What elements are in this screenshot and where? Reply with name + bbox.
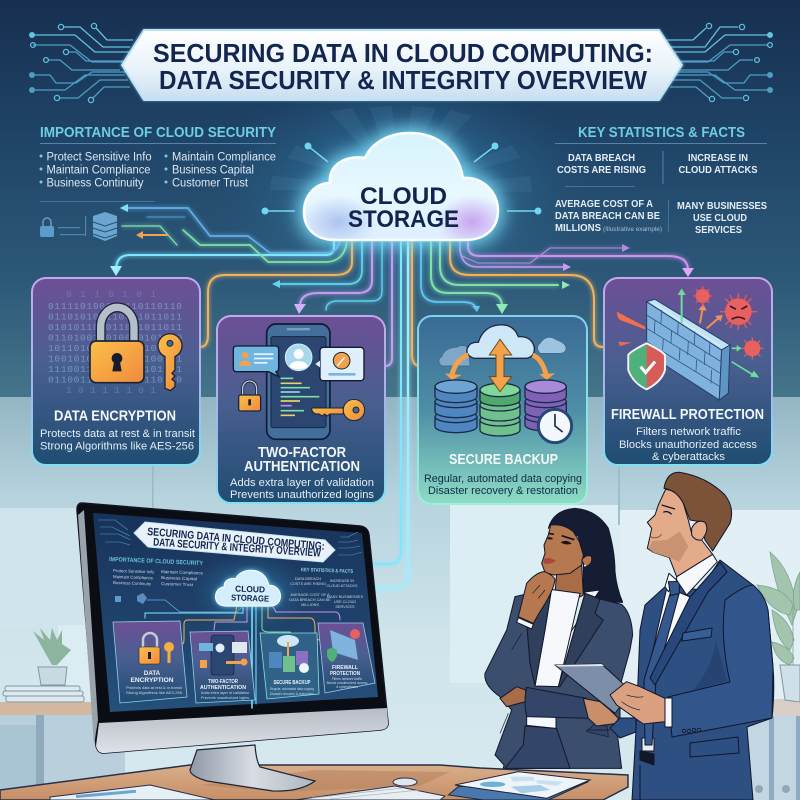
mini right section: CLOUD ATTACKS — [326, 584, 358, 588]
man collar — [647, 472, 732, 596]
panel: importance of cloud security — [40, 124, 276, 241]
mini card: firewall — [318, 623, 375, 693]
mini banner — [134, 522, 335, 562]
woman head and hair — [542, 508, 623, 607]
card description — [40, 428, 195, 452]
mini title: SECURING DATA IN CLOUD COMPUTING: — [147, 526, 325, 553]
right cabinet and plant — [746, 552, 800, 800]
man hip pocket — [690, 737, 739, 757]
mini card: encryption: Protects data at rest & in transit — [126, 686, 183, 690]
mini right section: COSTS ARE RISING — [290, 582, 326, 586]
man lapel — [650, 562, 727, 685]
man waist and belt — [640, 738, 654, 800]
icon: phone with verification — [233, 324, 365, 439]
mini left section: Maintain Compliance — [113, 574, 154, 580]
card description — [230, 477, 374, 501]
man shadow fold — [693, 640, 727, 690]
card description — [619, 426, 757, 463]
cloud label: STORAGE — [348, 206, 459, 233]
stat: breach costs — [557, 152, 646, 176]
cloud storage hub — [300, 133, 508, 248]
icon: right plant — [757, 552, 800, 665]
stat: cloud attacks — [678, 152, 758, 176]
mini left section: Business Continuity — [113, 580, 152, 586]
card heading: AUTHENTICATION — [244, 458, 360, 475]
mini card: encryption: ENCRYPTION — [130, 677, 174, 684]
desk — [0, 765, 628, 800]
mini card: authentication: Prevents unauthorized logins — [201, 696, 249, 700]
card description: Adds extra layer of validation — [230, 477, 374, 489]
circuit traces: right — [667, 23, 773, 102]
mini left section: Protect Sensitive Info — [113, 568, 155, 574]
mini card: backup: Disaster recovery & restoration — [270, 692, 314, 696]
binary pattern: 1 0 1 1 1 1 0 1 — [66, 385, 156, 396]
man jacket — [632, 560, 774, 800]
card description: Disaster recovery & restoration — [428, 485, 578, 497]
man far sleeve — [610, 718, 636, 738]
binary pattern: 100101011010010100101 — [48, 354, 182, 364]
stat: average cost: DATA BREACH CAN BE — [555, 210, 660, 222]
binary pattern: 010101100011001011011 — [48, 322, 182, 333]
mini card: authentication — [190, 631, 255, 703]
card heading: FIREWALL PROTECTION — [611, 406, 764, 423]
mini cloud — [216, 570, 280, 606]
stat: breach costs: DATA BREACH — [568, 152, 635, 164]
bullet list: Maintain Compliance — [46, 164, 150, 176]
man hair — [664, 472, 732, 551]
woman blazer — [485, 588, 633, 768]
card heading: TWO-FACTOR — [258, 444, 346, 461]
icon: small database — [93, 212, 117, 241]
binary pattern: 0 1 1 0 1 0 1 — [66, 289, 156, 300]
mini right section: DATA BREACH CAN BE — [289, 598, 331, 602]
card description: Prevents unauthorized logins — [230, 489, 374, 501]
bullet list: Business Continuity — [46, 178, 144, 190]
icon: cloud backup with databases — [435, 325, 572, 443]
binary pattern: 011010100110011011011 — [48, 312, 182, 322]
card description: Strong Algorithms like AES-256 — [40, 440, 194, 452]
mini left section: Maintain Compliance — [161, 569, 204, 575]
mini card: encryption: DATA — [144, 670, 161, 677]
title line 1: SECURING DATA IN CLOUD COMPUTING: — [153, 38, 653, 68]
monitor stand — [190, 745, 315, 791]
stat: cloud attacks: INCREASE IN — [688, 152, 748, 164]
mini card: authentication: Adds extra layer of validation — [201, 691, 249, 695]
circuit traces: left — [29, 23, 133, 103]
mini card: authentication: TWO-FACTOR — [208, 679, 238, 685]
card description: Blocks unauthorized access — [619, 439, 757, 451]
stat: cloud use: USE CLOUD — [693, 212, 747, 224]
keyboard and mouse — [295, 778, 445, 800]
stat: average cost — [555, 198, 662, 234]
stat: average cost: MILLIONS — [555, 222, 601, 234]
mini card: backup: SECURE BACKUP — [274, 680, 311, 686]
stat: cloud use: SERVICES — [695, 224, 742, 236]
computer monitor — [77, 503, 388, 791]
mini card: firewall: Blocks unauthorized access — [327, 681, 368, 685]
mini left section: Business Capital — [161, 575, 197, 581]
card description — [424, 473, 582, 497]
mini title: DATA SECURITY & INTEGRITY OVERVIEW — [153, 537, 322, 560]
stat: average cost: (Illustrative example) — [603, 226, 662, 233]
monitor screen content — [93, 513, 378, 712]
card description: Regular, automated data copying — [424, 473, 582, 485]
mini right section: USE CLOUD — [334, 600, 356, 604]
bullet list: Business Capital — [172, 164, 254, 176]
binary pattern: 011110100011110110110 — [48, 301, 182, 312]
binary pattern: 011001101010010110110 — [48, 374, 182, 386]
bullet list: Maintain Compliance — [172, 152, 276, 164]
binary pattern: 111001101010110101101 — [48, 364, 182, 375]
mini card: firewall: Filters network traffic — [332, 677, 363, 681]
left cabinet with books and plant — [0, 628, 125, 800]
panel: two-factor authentication — [217, 316, 385, 503]
man tie — [644, 594, 679, 745]
mini card: firewall: PROTECTION — [330, 671, 360, 677]
mini left section: Customer Trust — [161, 581, 194, 587]
card description: & cyberattacks — [652, 451, 726, 463]
woman raised hand — [517, 572, 555, 629]
background: dark upper graphic — [0, 0, 800, 397]
icon: padlock and key — [90, 307, 182, 391]
mini card: encryption — [113, 621, 187, 703]
title line 2: DATA SECURITY & INTEGRITY OVERVIEW — [159, 65, 647, 95]
man chest pocket — [682, 628, 712, 641]
heading: importance: IMPORTANCE OF CLOUD SECURITY — [40, 124, 276, 141]
monitor body — [77, 503, 388, 753]
binary pattern — [48, 289, 182, 396]
panel: firewall protection — [604, 278, 772, 465]
background: light office wall — [0, 397, 800, 800]
mini right section — [289, 567, 364, 609]
mini left section: IMPORTANCE OF CLOUD SECURITY — [109, 557, 203, 567]
man neck and face — [647, 489, 713, 577]
man hand — [610, 682, 665, 724]
man sleeve buttons — [682, 728, 701, 733]
panel: data encryption — [32, 278, 200, 465]
mini right section: DATA BREACH — [295, 577, 321, 581]
bullet list: Customer Trust — [172, 178, 249, 190]
stat: cloud use: MANY BUSINESSES — [677, 200, 767, 212]
mini right section: MILLIONS — [301, 603, 319, 607]
mini card: backup — [260, 633, 319, 699]
mini right section: INCREASE IN — [330, 579, 354, 583]
mini right section: MANY BUSINESSES — [327, 595, 364, 599]
mini circuit traces — [98, 520, 362, 555]
tablet — [555, 664, 632, 726]
bullet list — [40, 152, 276, 190]
mini cloud label: STORAGE — [231, 592, 270, 604]
cloud spark lines — [262, 143, 541, 214]
mini wires — [145, 600, 340, 708]
card heading — [244, 444, 360, 475]
mini card: firewall: FIREWALL — [332, 665, 358, 671]
mini right section: SERVICES — [335, 605, 355, 609]
man shirt — [648, 587, 690, 678]
icon: small padlock — [40, 216, 86, 237]
card description: Filters network traffic — [636, 426, 742, 438]
binary pattern: 011010011010010101010 — [48, 332, 182, 344]
cloud label: CLOUD — [360, 183, 447, 210]
person: woman in blazer — [485, 508, 633, 768]
woman shirt — [535, 590, 600, 690]
documents on desk — [448, 772, 590, 800]
mini cloud label: CLOUD — [235, 583, 265, 595]
panel: secure backup — [418, 316, 587, 504]
mini card: authentication: AUTHENTICATION — [200, 685, 246, 691]
card heading: SECURE BACKUP — [449, 451, 558, 468]
bullet list: Protect Sensitive Info — [46, 152, 152, 164]
man cuff — [665, 698, 672, 727]
binary pattern: 101101011010110101101 — [48, 343, 182, 354]
stat: average cost: AVERAGE COST OF A — [555, 198, 653, 210]
icon: firewall with shield and threats — [617, 286, 764, 400]
mini card: encryption: Strong Algorithms like AES-256 — [126, 691, 182, 695]
mini card: backup: Regular, automated data copying — [270, 687, 314, 691]
man sleeve — [668, 585, 773, 737]
mini card: firewall: & cyberattacks — [336, 685, 358, 689]
mini left section — [109, 557, 204, 604]
stat: breach costs: COSTS ARE RISING — [557, 164, 646, 176]
icon: left plant — [33, 628, 71, 665]
cloud label — [348, 183, 459, 233]
wire arrowheads — [110, 204, 694, 314]
cloud background glow and rays — [210, 65, 590, 315]
heading: key statistics: KEY STATISTICS & FACTS — [578, 124, 745, 141]
mini cloud label — [231, 583, 270, 604]
mini right section: AVERAGE COST OF A — [290, 593, 330, 597]
title banner — [120, 29, 684, 101]
mini right section: KEY STATISTICS & FACTS — [301, 567, 354, 575]
person: man in suit — [610, 472, 774, 800]
panel: key statistics and facts — [555, 124, 767, 236]
stat: cloud attacks: CLOUD ATTACKS — [678, 164, 758, 176]
woman near hand — [583, 698, 618, 726]
stat: cloud use — [677, 200, 767, 236]
card description: Protects data at rest & in transit — [40, 428, 195, 440]
card heading: DATA ENCRYPTION — [54, 408, 176, 424]
connector wires from cloud to cards — [116, 208, 688, 588]
